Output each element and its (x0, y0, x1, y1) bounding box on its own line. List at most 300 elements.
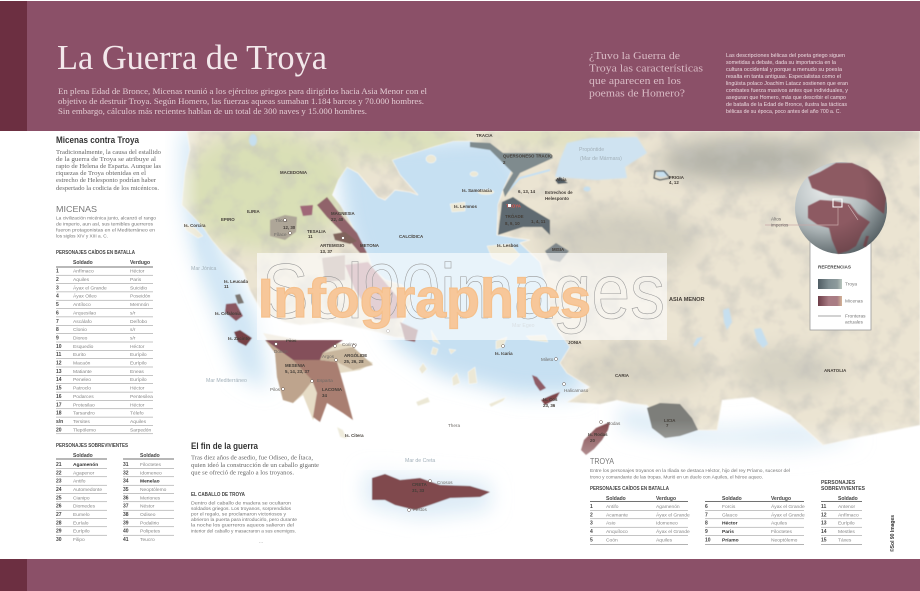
map labels: 8, 9, 10 (505, 221, 520, 226)
table: caídos en batalla, Troya: 2 (590, 512, 593, 518)
table: caídos en batalla: Deífobo (130, 319, 147, 325)
table: sobrevivientes: Agamenón (73, 462, 98, 468)
table: caídos en batalla: Antíloco (73, 302, 91, 308)
text block: quien ideó la construcción de un caballo gigante (191, 462, 319, 469)
table: caídos en batalla: 4 (56, 294, 59, 300)
table: caídos en batalla: 5 (56, 302, 59, 308)
table: caídos en batalla: Memnón (130, 302, 149, 308)
answer text: sometidas a debate, dada su importancia en la (726, 60, 836, 66)
table: caídos en batalla: Protesilao (73, 402, 95, 408)
map labels: Is. Rodas (588, 432, 608, 437)
table: caídos en batalla, Troya: Glauco (722, 512, 738, 518)
table: sobrevivientes: Diomedes (73, 504, 96, 510)
table: caídos en batalla: 17 (56, 402, 62, 408)
map labels: ILIRIA (247, 209, 261, 214)
map labels: Propóntide (579, 147, 604, 153)
table: sobrevivientes: 36 (123, 495, 129, 501)
table: caídos en batalla: Patroclo (73, 386, 91, 392)
text block: El caballo de Troya (191, 500, 297, 545)
table: sobrevivientes, Troya: 11 (821, 504, 827, 510)
map labels: Mar de Creta (405, 458, 435, 464)
table: sobrevivientes: PERSONAJES SOBREVIVIENTES (56, 443, 129, 449)
heading: Micenas contra Troya (56, 135, 140, 146)
table: sobrevivientes, Troya: Mestles (838, 529, 855, 535)
table: sobrevivientes, Troya: SOBREVIVIENTES (821, 486, 866, 492)
text block: trono y comandante de las tropas. Murió en un duelo con Aquiles, el héroe aqueo. (590, 474, 763, 480)
map labels: Pilos (270, 387, 281, 392)
map labels: Estrechos de (545, 190, 573, 195)
table: caídos en batalla: Podarces (73, 394, 94, 400)
subheading: Micenas: MICENAS (56, 204, 97, 214)
text block: Micenas (56, 216, 156, 240)
map labels: Tricca (275, 218, 288, 223)
map labels: TESALIA (307, 229, 327, 234)
region: Misia (545, 243, 569, 262)
table: caídos en batalla, Troya: Idomeneo (656, 521, 678, 527)
table: sobrevivientes, Troya: PERSONAJES (821, 480, 856, 486)
table: sobrevivientes, Troya: Eurípilo (838, 521, 855, 527)
text block: El caballo de Troya: ... (259, 540, 263, 545)
table: caídos en batalla, Troya: Verdugo (656, 496, 676, 502)
table: sobrevivientes: Eurípilo (73, 529, 90, 535)
table: caídos en batalla, Troya: Antifo (606, 504, 619, 510)
map labels: Mar Egeo (512, 323, 535, 329)
intro text: En plena Edad de Bronce, Micenas reunió a los ejércitos griegos para dirigirlos hacia Asia Menor con el (58, 86, 428, 96)
table: sobrevivientes: Filipo (73, 537, 85, 543)
table: sobrevivientes: Néstor (140, 504, 155, 510)
Dardanelles (505, 170, 550, 194)
answer text: combates fuerza masivos antes que individuales, y (726, 88, 849, 94)
table: caídos en batalla: Paris (130, 277, 142, 283)
map labels: 4, 12 (669, 180, 679, 185)
map labels: MAGNESIA (331, 211, 355, 216)
text block: Micenas: de imperio, aun así, sus temibles guerreros (56, 222, 154, 228)
table: caídos en batalla: 12 (56, 360, 62, 366)
table: caídos en batalla, Troya: 1 (590, 504, 593, 510)
map labels (184, 133, 847, 512)
watermark: Infographics (258, 267, 591, 329)
answer text: Las descripciones bélicas del poeta griego siguen (726, 53, 845, 59)
table: caídos en batalla: Eurípilo (130, 377, 147, 383)
table: caídos en batalla, Troya: Áyax el Grande (771, 511, 805, 518)
table: caídos en batalla: 9 (56, 336, 59, 342)
table: sobrevivientes: Eumelo (73, 512, 90, 518)
table: caídos en batalla, Troya: 8 (705, 521, 708, 527)
table: sobrevivientes: 32 (123, 470, 129, 476)
table: caídos en batalla, Troya: Héctor (722, 521, 738, 527)
lakes (249, 134, 768, 348)
map labels: 31, 33 (412, 488, 425, 493)
question: ¿Tuvo la Guerra de (589, 50, 680, 62)
answer text: aseguran que Homero, más que describir el campo (726, 95, 846, 101)
table: caídos en batalla, Troya: Agamenón (656, 504, 680, 510)
map labels: Thera (448, 423, 460, 428)
map labels: TRÓADE (505, 214, 524, 219)
region: Rodas (581, 422, 610, 455)
city markers (274, 204, 602, 512)
table: caídos en batalla, Troya: Coón (606, 537, 618, 543)
map labels: Fílace (274, 232, 287, 237)
map labels: 6, 13, 14 (518, 189, 536, 194)
table: caídos en batalla: Peneleo (73, 377, 91, 383)
region: Zacinto (234, 330, 252, 346)
table: caídos en batalla: 8 (56, 327, 59, 333)
islands (183, 155, 548, 439)
map labels: QUERSONESO TRACIO (503, 154, 553, 158)
table: sobrevivientes: 35 (123, 487, 129, 493)
table: caídos en batalla: s/r (130, 327, 136, 333)
table: sobrevivientes, Troya (821, 480, 866, 544)
title: La Guerra de Troya (57, 38, 327, 77)
answer text: cultura occidental y porque a menudo su poesía (726, 67, 842, 73)
map labels: 20 (590, 438, 595, 443)
map labels: 11 (224, 284, 229, 289)
map labels: 25, 26, 28 (344, 359, 364, 364)
label: altos imperios: Altos (771, 216, 782, 222)
map labels: Corinto (342, 342, 357, 347)
fades to white (160, 131, 200, 559)
map labels: Esparta (317, 378, 333, 383)
table: caídos en batalla, Troya: Neoptólemo (771, 537, 798, 543)
map labels: TRACIA (476, 133, 493, 138)
region: Argolide (320, 347, 373, 370)
table: caídos en batalla: Áyax el Grande (73, 284, 107, 291)
table: caídos en batalla: 6 (56, 310, 59, 316)
text block: El caballo de Troya: interior del caballo y masacraron a sus enemigos. (191, 528, 296, 534)
table: caídos en batalla, Troya: Áyax el Grande (656, 511, 690, 518)
region: Tesalia (270, 215, 297, 240)
map labels: (Mar de Mármara) (580, 156, 622, 162)
table: sobrevivientes, Troya: 15 (821, 537, 827, 543)
table: sobrevivientes: 39 (123, 520, 129, 526)
table: caídos en batalla: 7 (56, 319, 59, 325)
region: Frigia (654, 171, 670, 180)
map labels: Is. Lesbos (497, 243, 519, 248)
table: sobrevivientes (56, 443, 174, 543)
table: caídos en batalla: 2 (56, 277, 59, 283)
table: caídos en batalla, Troya: Forcis (722, 504, 736, 510)
table: caídos en batalla: Ascálafo (73, 319, 92, 325)
answer text: bélicas de su época, poco antes del año 700 a. C. (726, 109, 841, 115)
table: caídos en batalla: Suicidio (130, 285, 147, 291)
table: caídos en batalla, Troya: 7 (705, 512, 708, 518)
table: sobrevivientes: 31 (123, 462, 129, 468)
map labels: MESENIA (285, 363, 306, 368)
table: sobrevivientes: Agapenor (73, 470, 95, 476)
legend item: Troya: Troya (845, 282, 857, 288)
map labels: Is. Corcira (184, 223, 206, 228)
table: caídos en batalla: Eurípilo (130, 360, 147, 366)
legend item: Micenas: Micenas (845, 298, 863, 304)
text block: Tradicionalmente, la causa del estallido (56, 149, 161, 156)
map labels: 23, 36 (543, 403, 556, 408)
text block: Tras diez años de asedio, fue Odiseo, de Ítaca, (191, 454, 313, 462)
table: sobrevivientes: 21 (56, 462, 62, 468)
table: sobrevivientes: Podalirio (140, 520, 159, 526)
subheading: El caballo de Troya: EL CABALLO DE TROYA (191, 492, 245, 498)
table: caídos en batalla: Esquedio (73, 344, 94, 350)
table: caídos en batalla: Héctor (130, 344, 145, 350)
heading: TROYA (590, 456, 614, 466)
Mycenaean regions (225, 197, 610, 510)
table: sobrevivientes: 37 (123, 504, 129, 510)
table: caídos en batalla, Troya: Acamante (606, 512, 628, 518)
map labels: CARIA (615, 373, 630, 378)
map labels: Dorion (274, 349, 288, 354)
table: caídos en batalla: Tersites (73, 419, 90, 425)
map labels: 2 (503, 160, 506, 165)
table: sobrevivientes: Cianipo (73, 495, 90, 501)
table: sobrevivientes: 25 (56, 495, 62, 501)
map labels: Mar Jónica (191, 266, 216, 272)
table: caídos en batalla: s/n (56, 419, 63, 425)
table: caídos en batalla, Troya: Verdugo (771, 496, 791, 502)
table: caídos en batalla: s/r (130, 336, 136, 342)
map labels: EPIRO (221, 217, 235, 222)
table: sobrevivientes, Troya: Táxes (838, 537, 852, 543)
legend item: Fronteras actuales (818, 314, 866, 326)
map labels: JONIA (568, 340, 582, 345)
panel: Troya (590, 456, 866, 544)
table: caídos en batalla: Tarsandro (73, 411, 95, 417)
table: caídos en batalla, Troya: Paris (722, 529, 734, 535)
map labels: Is. Cefalonia (215, 311, 241, 316)
table: caídos en batalla: 18 (56, 411, 62, 417)
text block (56, 149, 162, 192)
table: caídos en batalla, Troya: Anquíloco (606, 529, 628, 535)
label: altos imperios: imperios (771, 222, 789, 228)
table: caídos en batalla: Soldado (73, 260, 93, 266)
map labels: Halicarnaso (564, 388, 589, 393)
table: caídos en batalla, Troya: 5 (590, 537, 593, 543)
intro text: objetivo de destruir Troya. Según Homero, las fuerzas aqueas sumaban 1.184 barcos y 70.000 hombres. (58, 96, 424, 106)
table: caídos en batalla, Troya: Asio (606, 521, 616, 527)
text block: Entre los personajes troyanos en la Ilíada se destaca Héctor, hijo del rey Príamo, sucesor del (590, 468, 790, 474)
table: sobrevivientes: 34 (123, 479, 129, 485)
map labels: Is. Lemnos (454, 204, 477, 209)
table: caídos en batalla: 13 (56, 369, 62, 375)
legend item: Fronteras actuales: actuales (845, 320, 863, 326)
table: sobrevivientes, Troya: Soldado (838, 496, 858, 502)
map labels: ARGÓLIDE (344, 353, 367, 358)
table: sobrevivientes: Antifo (73, 479, 86, 485)
map labels: ANATOLIA (824, 368, 847, 373)
table: sobrevivientes: 22 (56, 470, 62, 476)
map labels: CRETA (412, 482, 428, 487)
table: caídos en batalla: 3 (56, 285, 59, 291)
table: caídos en batalla: 1 (56, 269, 59, 275)
region: Leucas (235, 294, 244, 304)
table: sobrevivientes: 26 (56, 504, 62, 510)
map labels: Is. Samotracia (462, 188, 492, 193)
table: sobrevivientes: 29 (56, 529, 62, 535)
table: caídos en batalla: Anfímaco (73, 269, 94, 275)
region: Beocia and Atica (322, 255, 345, 282)
text block: El caballo de Troya: abrieron la puerta para introducirlo, pero durante (191, 517, 297, 523)
table: caídos en batalla: Pentesilea (130, 394, 153, 400)
region: Cefalonia (225, 303, 243, 321)
region: Laconia (293, 360, 353, 422)
text block: El caballo de Troya: Dentro del caballo de madera se ocultaron (191, 500, 291, 506)
table: caídos en batalla, Troya (590, 484, 805, 544)
map (173, 131, 920, 524)
region: Cos (541, 392, 560, 405)
map labels: Alcia (556, 177, 567, 182)
table: caídos en batalla: Tlepólemo (73, 427, 96, 433)
map labels: MACEDONIA (280, 170, 308, 175)
table: caídos en batalla, Troya: Aquiles (656, 537, 673, 543)
map labels: Rodas (607, 421, 621, 426)
panel: Micenas contra Troya (40, 131, 174, 559)
answer text: de batalla de la Edad de Bronce, ilustra las tácticas (726, 102, 848, 108)
text block: riquezas de Troya obtenidas en el (56, 170, 146, 177)
region: Quersoneso Tracio (470, 142, 553, 197)
table: caídos en batalla: Verdugo (130, 260, 150, 266)
legend (810, 240, 871, 330)
region: Licia (647, 403, 698, 438)
watermark: Sol90images (262, 247, 665, 335)
table: caídos en batalla: Sarpedón (130, 427, 151, 433)
table: caídos en batalla: Aquiles (130, 419, 147, 425)
table: caídos en batalla: Aquiles (73, 277, 90, 283)
table: sobrevivientes: 28 (56, 520, 62, 526)
land tints (183, 131, 920, 444)
map labels: 13, 37 (320, 249, 333, 254)
legend: REFERENCIAS (818, 264, 851, 270)
table: caídos en batalla: Dioreo (73, 336, 88, 342)
table: caídos en batalla: Clonio (73, 327, 87, 333)
table: sobrevivientes: Meriones (140, 495, 161, 501)
map labels: Is. Zacinto (228, 336, 250, 341)
table: sobrevivientes: Menelao (140, 479, 160, 485)
intro text (58, 86, 428, 116)
table: caídos en batalla: 15 (56, 386, 62, 392)
table: sobrevivientes: Filoctetes (140, 462, 161, 468)
table: sobrevivientes: Soldado (140, 453, 160, 459)
panel: El fin de la guerra (191, 441, 319, 545)
table: sobrevivientes, Troya: 14 (821, 529, 827, 535)
answer text: resalta en tanta antiguas. Especialistas como el (726, 74, 841, 80)
question (589, 50, 703, 100)
table: caídos en batalla: Áyax Oileo (73, 293, 97, 300)
map labels: 5, 14, 23, 37 (285, 369, 310, 374)
map labels: METONA (360, 243, 380, 248)
map labels: LACONIA (322, 387, 343, 392)
table: sobrevivientes: 40 (123, 529, 129, 535)
map labels: 22, 40 (331, 217, 344, 222)
map labels: FRIGIA (669, 175, 685, 180)
table: sobrevivientes: Euríalo (73, 520, 89, 526)
table: sobrevivientes: Automedonte (73, 487, 102, 493)
answer text (726, 53, 849, 115)
credit: ©Sol 90 Images (889, 515, 896, 552)
map labels: Festos (413, 507, 427, 512)
table: caídos en batalla, Troya: PERSONAJES CAÍDOS EN BATALLA (590, 484, 669, 492)
table: caídos en batalla: Héctor (130, 386, 145, 392)
table: caídos en batalla, Troya: Áyax el Grande (656, 528, 690, 535)
map labels: 12, 30 (283, 225, 296, 230)
table: caídos en batalla: Héctor (130, 402, 145, 408)
table: caídos en batalla, Troya: 9 (705, 529, 708, 535)
table: sobrevivientes: Polipetes (140, 529, 161, 535)
table: caídos en batalla: s/r (130, 310, 136, 316)
table: sobrevivientes: 38 (123, 512, 129, 518)
text block: Micenas: fueron protagonistas en el Mediterráneo en (56, 228, 155, 234)
text block: Micenas: La civilización micénica junto, alcanzó el rango (56, 216, 156, 222)
map labels: CALCÍDICA (399, 234, 424, 239)
map labels: Helesponto (545, 196, 569, 201)
table: sobrevivientes: 41 (123, 537, 129, 543)
Trojan regions (470, 142, 698, 438)
footer band (0, 559, 920, 591)
text block: estrecho de Helesponto podrían haber (56, 177, 157, 184)
text block: Micenas: los siglos XIV y XIII a. C. (56, 234, 108, 240)
table: sobrevivientes, Troya: 13 (821, 521, 827, 527)
table: sobrevivientes: Soldado (73, 453, 93, 459)
table: sobrevivientes: 24 (56, 487, 62, 493)
sea: Aegean (172, 131, 860, 518)
table: caídos en batalla, Troya: Soldado (606, 496, 626, 502)
table: sobrevivientes: Neoptólemo (140, 487, 167, 493)
table: caídos en batalla: Macaón (73, 360, 91, 366)
question: poemas de Homero? (589, 88, 685, 100)
map labels: Pilos (286, 338, 297, 343)
table: caídos en batalla: Eneas (130, 369, 144, 375)
map labels: Is. Citera (345, 433, 364, 438)
map labels: Is. Icaria (495, 351, 513, 356)
map labels: MISIA (552, 247, 565, 252)
land: mainland Greece, Thrace and Asia Minor (182, 131, 920, 445)
map labels: Mar Mediterráneo (206, 378, 247, 384)
text block: El caballo de Troya: la noche los guerreros aqueos salieron del (191, 522, 294, 528)
table: caídos en batalla (56, 248, 153, 434)
map labels: TROYA (506, 204, 522, 208)
map labels: ARTEMISIO (320, 243, 345, 248)
land: Peloponnese (263, 333, 373, 420)
intro text: Sin embargo, cálculos más recientes hablan de un total de 300 naves y 15.000 hombres. (58, 106, 367, 116)
table: caídos en batalla: Télefo (130, 411, 144, 417)
map labels: LICIA (664, 418, 676, 423)
table: caídos en batalla, Troya: Aquiles (771, 521, 788, 527)
map labels: Is. Cos (543, 397, 558, 402)
region: Creta (372, 474, 490, 510)
table: caídos en batalla, Troya: Príamo (722, 537, 739, 543)
map labels: Is. Leucada (224, 279, 248, 284)
table: caídos en batalla: Matiante (73, 369, 92, 375)
table: sobrevivientes, Troya: Antenor (838, 504, 856, 510)
table: caídos en batalla: 16 (56, 394, 62, 400)
map labels: Cnosos (437, 480, 453, 485)
map labels: 34 (322, 393, 327, 398)
globe locator (765, 162, 887, 254)
table: caídos en batalla, Troya: 10 (705, 537, 711, 543)
map labels: Mileto (541, 357, 554, 362)
table: caídos en batalla: Eurípilo (130, 352, 147, 358)
region: Magnesia (317, 197, 367, 253)
table: caídos en batalla: 14 (56, 377, 62, 383)
table: caídos en batalla: 20 (56, 427, 62, 433)
region: Mesenia (265, 340, 313, 403)
text block: El caballo de Troya: soldados griegos. Los troyanos, sorprendidos (191, 506, 292, 512)
question: Troya las características (589, 62, 703, 74)
table: sobrevivientes: 30 (56, 537, 62, 543)
table: caídos en batalla, Troya: 4 (590, 529, 593, 535)
heading: El fin de la guerra (191, 441, 259, 452)
header band (0, 1, 920, 131)
table: caídos en batalla: 11 (56, 352, 62, 358)
text block: de la guerra de Troya se atribuye al (56, 156, 156, 163)
table: sobrevivientes: 23 (56, 479, 62, 485)
